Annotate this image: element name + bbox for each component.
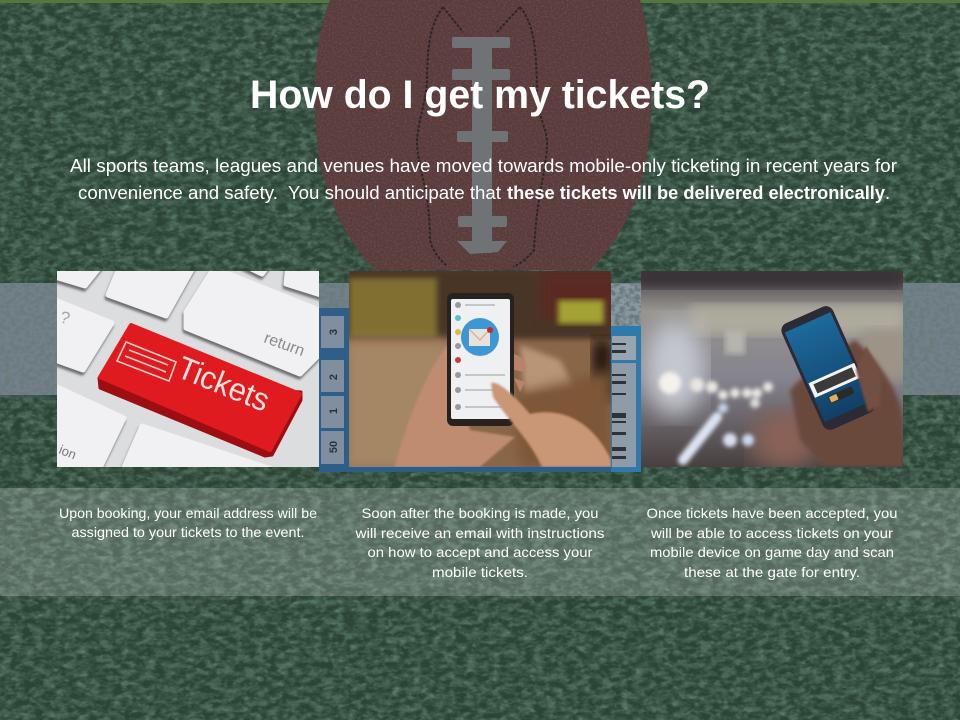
red tickets key	[99, 325, 301, 456]
football body	[315, 0, 652, 270]
left hand	[395, 345, 515, 467]
red tickets key: Tickets	[172, 349, 275, 418]
ticket strip behind photos: 2	[328, 374, 340, 380]
caption 3	[646, 505, 898, 580]
photo 3: phone with barcode ticket against stadium lights	[635, 268, 910, 470]
football	[315, 0, 652, 270]
caption 2: Soon after the booking is made, you	[362, 505, 598, 521]
key legends: return	[262, 330, 307, 360]
email icon	[461, 318, 499, 356]
hand behind phone	[790, 340, 903, 467]
caption 3: will be able to access tickets on your	[650, 525, 893, 541]
phone screen	[451, 299, 510, 419]
bokeh lights	[659, 372, 773, 460]
caption 3: these at the gate for entry.	[684, 564, 860, 580]
caption 2: on how to accept and access your	[368, 544, 593, 560]
intro paragraph: these tickets will be delivered electronically	[507, 182, 886, 203]
ticket strip behind photos: 1	[328, 408, 340, 414]
intro paragraph	[70, 155, 897, 203]
caption 2: mobile tickets.	[432, 564, 528, 580]
caption 3: mobile device on game day and scan	[650, 544, 894, 560]
caption 1: Upon booking, your email address will be	[59, 505, 317, 521]
photo 1: tickets keyboard key: ?	[58, 308, 72, 328]
photo 2: hand holding phone with email	[345, 267, 620, 470]
ticket strip behind photos: 50	[328, 441, 340, 453]
photo 1: tickets keyboard key	[55, 266, 324, 472]
caption 2	[354, 505, 604, 580]
football seams	[417, 7, 547, 267]
intro paragraph: convenience and safety. You should anticipate that	[78, 182, 501, 203]
intro paragraph: All sports teams, leagues and venues have moved towards mobile-only ticketing in recent years for	[70, 155, 897, 176]
blurred room backdrop	[345, 267, 620, 470]
football laces	[452, 37, 510, 254]
title: How do I get my tickets?	[250, 73, 710, 117]
ticket strip behind photos	[319, 284, 641, 472]
caption 2: will receive an email with instructions	[354, 525, 604, 541]
keyboard keys	[55, 266, 324, 472]
photo 1: tickets keyboard key: ion	[57, 442, 79, 462]
ticket strip behind photos: 3	[328, 329, 340, 335]
right hand and finger	[491, 383, 611, 467]
caption 1: assigned to your tickets to the event.	[72, 524, 304, 540]
intro paragraph: .	[885, 182, 890, 203]
background: painted field line	[0, 283, 960, 395]
bokeh backdrop	[635, 268, 910, 470]
fingers in front	[856, 346, 881, 412]
phone	[447, 293, 514, 426]
translucent caption band	[0, 488, 960, 596]
caption 3: Once tickets have been accepted, you	[646, 505, 898, 521]
phone	[779, 304, 877, 432]
caption 1	[59, 505, 317, 540]
